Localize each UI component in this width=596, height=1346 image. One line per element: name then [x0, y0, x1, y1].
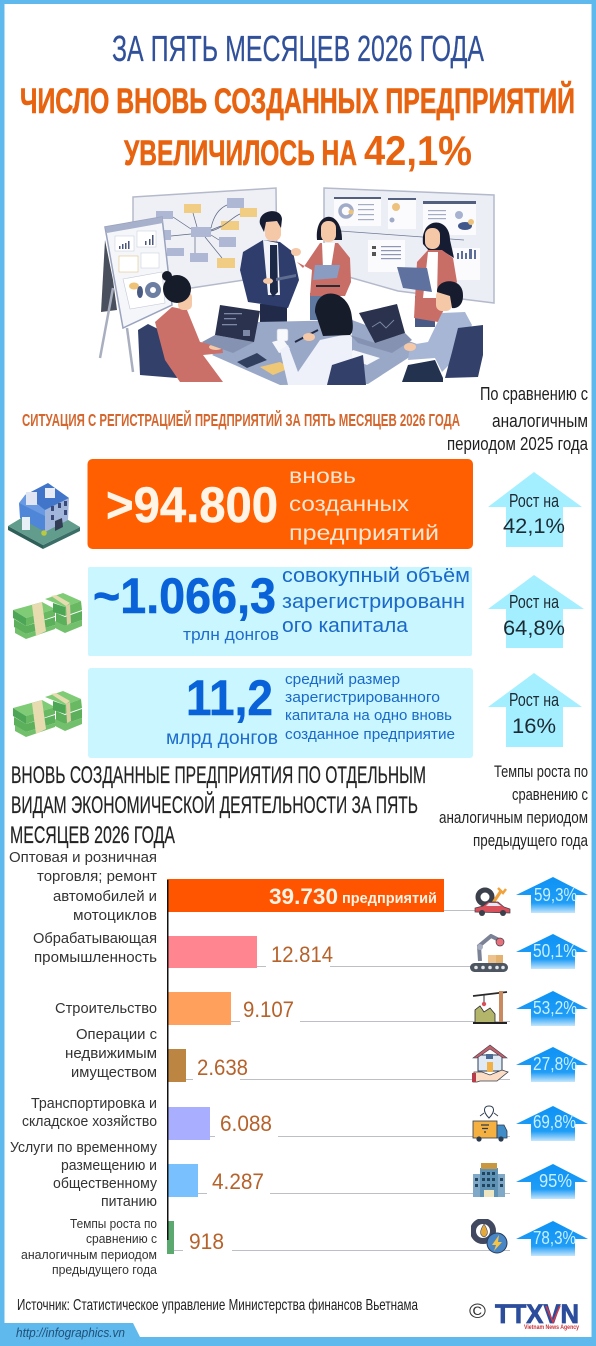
footer url: http://infographics.vn: [16, 1325, 125, 1340]
value: 39.730: 39.730: [269, 884, 338, 909]
arrow: growth 42,1%: [488, 472, 582, 547]
description: вновь: [289, 465, 356, 488]
arrow: growth 64,8%: Рост на: [509, 591, 560, 612]
arrow: growth 64,8%: 64,8%: [503, 617, 565, 640]
arrow: 27,8%: [516, 1047, 588, 1082]
value: 918: 918: [189, 1229, 224, 1254]
description: созданных: [289, 493, 410, 516]
flip chart: [100, 217, 172, 372]
arrow: growth 64,8%: [488, 575, 584, 648]
description: средний размер: [285, 672, 400, 688]
label: manufacturing: промышленность: [34, 949, 157, 966]
whiteboard right: [324, 188, 494, 303]
icon: money stack 1: [13, 593, 82, 639]
description: ого капитала: [282, 614, 409, 637]
panel: registered capital: [88, 564, 472, 656]
arrow: growth 42,1%: 42,1%: [503, 515, 565, 538]
footer band: [0, 1323, 596, 1346]
label: growth rate small: аналогичным периодом: [21, 1247, 157, 1262]
label: accommodation: [10, 1139, 157, 1210]
value: 1.066,3: ~1.066,3: [93, 568, 276, 624]
icon: oil drop and energy gear: [473, 1221, 507, 1253]
label: trade: мотоциклов: [73, 907, 157, 924]
panel: average capital: [88, 668, 473, 758]
label: accommodation: общественному: [53, 1175, 157, 1192]
label: real estate: Операции с: [76, 1026, 157, 1043]
seated woman left: [138, 271, 223, 382]
logo: TTXVN: TTXVN: [495, 1299, 579, 1329]
arrow: 59,3%: [516, 877, 588, 913]
label: manufacturing: Обрабатывающая: [33, 930, 157, 947]
bar: 6.088: [167, 1107, 210, 1140]
seated woman centre from back: [272, 293, 366, 385]
icon: robot arm on conveyor: [470, 936, 508, 972]
arrow: 95%: [516, 1164, 588, 1199]
bar: 9.107: [167, 992, 231, 1025]
value: 2.638: 2.638: [197, 1055, 248, 1080]
arrow: 50,1%: 50,1%: [533, 941, 577, 961]
laptop right: [350, 304, 412, 353]
copyright sign: ©: [469, 1301, 486, 1323]
arrow: 27,8%: 27,8%: [533, 1054, 577, 1074]
arrow: 50,1%: [516, 934, 588, 969]
description: зарегистрированного: [285, 690, 440, 706]
label: growth rate small: Темпы роста по: [70, 1216, 157, 1231]
value: 39.730: предприятий: [342, 890, 437, 907]
value: 4.287: 4.287: [212, 1169, 264, 1194]
label: trade: торговля; ремонт: [37, 868, 157, 885]
bar: 918: [167, 1221, 174, 1254]
standing man in navy suit: [240, 211, 301, 322]
section heading: by economic activity: [10, 762, 426, 849]
value: 94.800: >94.800: [106, 477, 278, 533]
arrow: 53,2%: 53,2%: [533, 998, 577, 1018]
label: manufacturing: [33, 930, 157, 966]
label: construction: Строительство: [55, 1000, 157, 1017]
value: 39.730: [269, 884, 437, 909]
bar: 12.814: [167, 936, 257, 968]
arrow: 78,3%: 78,3%: [533, 1228, 576, 1248]
description: созданное предприятие: [285, 727, 455, 743]
description: предприятий: [289, 522, 439, 545]
label: real estate: имуществом: [71, 1064, 157, 1081]
bar chart: enterprises by activity: [167, 879, 510, 1254]
icon: car and gear: [475, 888, 510, 916]
label: real estate: недвижимым: [65, 1045, 157, 1062]
section heading: by economic activity: МЕСЯЦЕВ 2026 ГОДА: [10, 822, 175, 849]
cup, notebooks and paper: [237, 329, 380, 375]
icon: hotel building: [473, 1163, 505, 1197]
description: совокупный объём: [282, 564, 470, 587]
description: [289, 465, 439, 545]
label: accommodation: питанию: [101, 1193, 157, 1210]
bar: 2.638: [167, 1049, 186, 1082]
arrow: 53,2%: [516, 991, 588, 1026]
source: Источник: Статистическое управление Министерства финансов Вьетнама: [17, 1297, 418, 1314]
arrow: growth 16%: 16%: [512, 715, 556, 738]
icon: money stack 2: [13, 691, 82, 737]
category labels: [9, 849, 158, 1277]
illustration: business team meeting: [100, 188, 494, 385]
description: зарегистрированн: [282, 590, 465, 613]
label: trade: автомобилей и: [53, 888, 157, 905]
icon: office building: [8, 483, 80, 549]
label: growth rate small: предыдущего года: [52, 1262, 158, 1277]
value: 11,2: 11,2: [186, 670, 273, 726]
whiteboard left: [133, 188, 277, 292]
unit: трлн донгов: [183, 625, 279, 644]
arrow: 78,3%: [516, 1221, 588, 1256]
arrow: 69,8%: 69,8%: [533, 1112, 576, 1132]
description: [282, 564, 470, 637]
label: accommodation: размещению и: [61, 1157, 157, 1174]
label: accommodation: Услуги по временному: [10, 1139, 157, 1156]
title line 3: 42,1%: [364, 127, 472, 174]
arrow: growth 16%: [488, 673, 582, 747]
label: growth rate small: [21, 1216, 158, 1277]
standing woman with tablet: [397, 222, 457, 327]
description: капитала на одно вновь: [285, 708, 452, 724]
bar: 39.730: [167, 879, 444, 912]
bar: 4.287: [167, 1164, 198, 1197]
label: transport: складское хозяйство: [22, 1113, 157, 1130]
meeting table: [212, 320, 425, 385]
comparison note: [447, 384, 589, 454]
laptop left: [202, 305, 260, 353]
icon: construction crane: [473, 991, 507, 1024]
arrow: 59,3%: 59,3%: [534, 885, 577, 905]
value: 9.107: 9.107: [243, 997, 294, 1022]
arrow: 95%: 95%: [539, 1171, 572, 1191]
label: growth rate small: сравнению с: [86, 1231, 157, 1246]
arrow: 69,8%: [516, 1106, 588, 1141]
unit: млрд донгов: [166, 728, 278, 749]
label: transport: [22, 1095, 157, 1130]
logo: TTXVN: Vietnam News Agency: [524, 1325, 580, 1331]
value: 12.814: 12.814: [271, 942, 333, 967]
label: real estate: [65, 1026, 157, 1081]
arrow: growth 42,1%: Рост на: [509, 490, 560, 511]
label: trade: [9, 849, 157, 924]
description: [285, 672, 455, 743]
title line 3: УВЕЛИЧИЛОСЬ НА: [124, 134, 357, 173]
icon: delivery truck: [473, 1106, 507, 1142]
icon: house on hand: [472, 1045, 508, 1082]
panel: new enterprises: [88, 459, 473, 549]
label: transport: Транспортировка и: [31, 1095, 157, 1112]
growth rate note: [439, 762, 588, 850]
arrow: growth 16%: Рост на: [509, 689, 560, 710]
value: 6.088: 6.088: [220, 1111, 272, 1136]
standing woman in salmon jacket: [297, 217, 351, 320]
axis: [167, 880, 168, 1240]
seated man right: [402, 281, 483, 382]
label: trade: Оптовая и розничная: [9, 849, 157, 866]
